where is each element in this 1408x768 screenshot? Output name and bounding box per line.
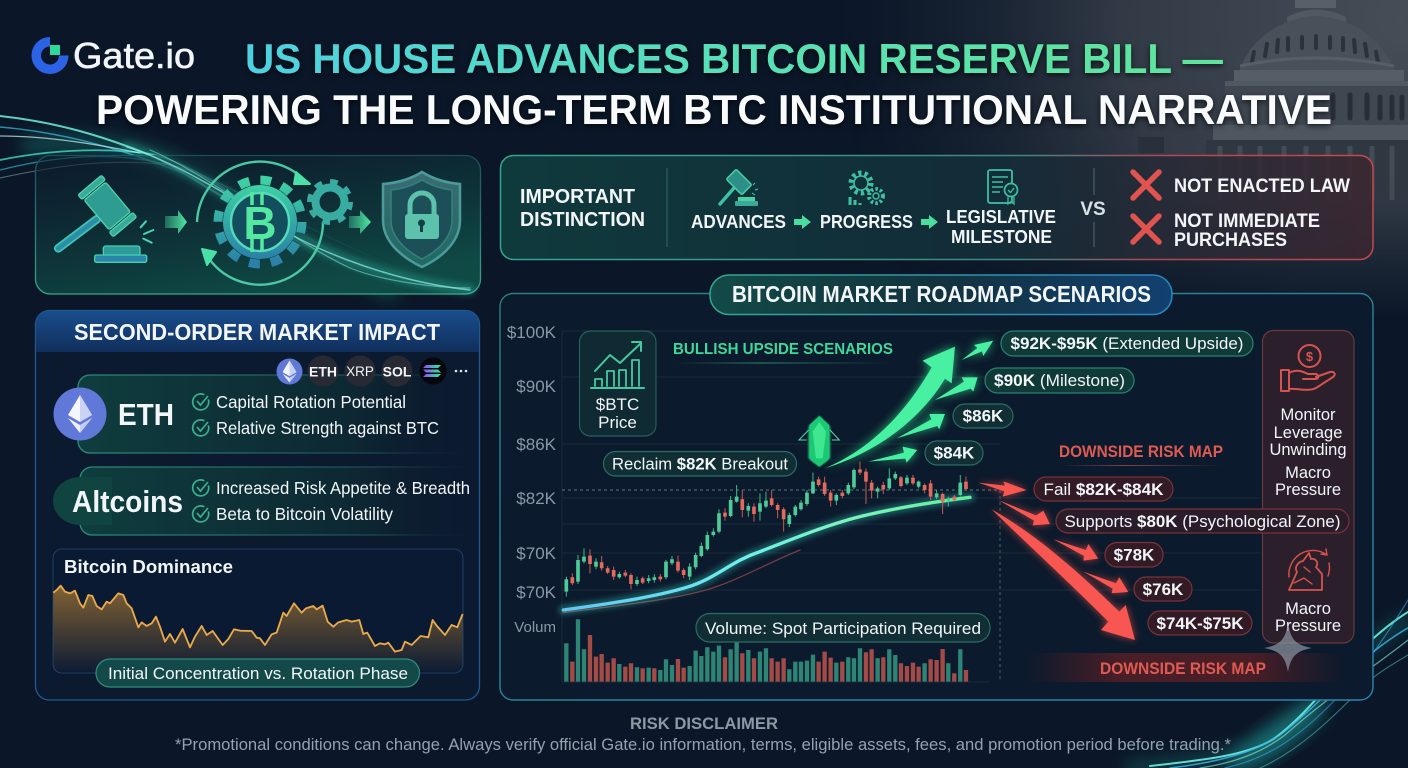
arrow bbox=[349, 210, 371, 234]
pill: $90K milestone: $90K (Milestone) bbox=[994, 371, 1125, 390]
icon: green breakout crystal bbox=[799, 416, 839, 467]
pill: $74K-$75K: $74K-$75K bbox=[1156, 614, 1244, 633]
VS divider bbox=[1080, 168, 1106, 247]
text: risk disclaimer heading: RISK DISCLAIMER bbox=[630, 715, 778, 733]
arrow bbox=[165, 210, 187, 234]
pill: volume note: Volume: Spot Participation Required bbox=[705, 619, 981, 638]
panel: risk monitor bbox=[1262, 330, 1354, 643]
chart: Bitcoin dominance bbox=[53, 549, 463, 687]
moving averages bbox=[563, 497, 970, 613]
text: monitor leverage: Pressure bbox=[1275, 481, 1341, 499]
text: monitor leverage bbox=[1269, 406, 1347, 499]
pill: $84K bbox=[925, 441, 983, 465]
illustration: US Capitol dome bbox=[1138, 0, 1408, 200]
axis labels: $86K bbox=[516, 435, 557, 454]
VS divider: VS bbox=[1080, 199, 1106, 220]
icon: gavel bbox=[58, 175, 153, 262]
band: downside risk map bbox=[1025, 653, 1345, 682]
pill: $76K: $76K bbox=[1143, 580, 1184, 599]
text: not immediate purchases bbox=[1174, 211, 1320, 251]
row: Altcoins bbox=[53, 467, 475, 535]
chart: Bitcoin dominance: Bitcoin Dominance bbox=[64, 557, 233, 577]
heading: important distinction bbox=[520, 186, 645, 231]
pill: $92K-$95K extended upside: $92K-$95K (Extended Upside) bbox=[1010, 334, 1244, 353]
axis labels bbox=[507, 323, 557, 636]
text: monitor leverage: Leverage bbox=[1274, 424, 1342, 442]
icon card: $BTC price: Price bbox=[598, 413, 637, 432]
pill: reclaim breakout: Reclaim $82K Breakout bbox=[612, 456, 788, 474]
row: Altcoins: Increased Risk Appetite & Breadth bbox=[216, 478, 470, 498]
pill: $76K bbox=[1134, 577, 1192, 601]
title bbox=[96, 35, 1332, 133]
title: US HOUSE ADVANCES BITCOIN RESERVE BILL — bbox=[245, 35, 1223, 82]
flow labels bbox=[691, 206, 1056, 247]
pill: $84K: $84K bbox=[934, 444, 975, 462]
axis labels: $70K bbox=[516, 583, 557, 602]
candles bbox=[566, 462, 966, 597]
pill: volume note bbox=[696, 614, 990, 642]
row: ETH: Capital Rotation Potential bbox=[216, 392, 406, 412]
volume bars bbox=[566, 619, 966, 682]
flow labels: LEGISLATIVE bbox=[946, 206, 1056, 227]
icon: red cross bbox=[1133, 172, 1159, 198]
text: not immediate purchases: PURCHASES bbox=[1174, 230, 1287, 251]
icon: bitcoin gear with cycle arrows bbox=[197, 162, 350, 285]
pill: fail $82K-$84K: Fail $82K-$84K bbox=[1044, 480, 1164, 499]
icon: hand holding coin: $ bbox=[1306, 349, 1314, 364]
icon: small gear bbox=[310, 182, 350, 222]
text: monitor leverage: Unwinding bbox=[1269, 441, 1347, 459]
pill: rotation caption bbox=[96, 659, 420, 687]
icon: macro bull pressure bbox=[1289, 549, 1329, 590]
text: not enacted law: NOT ENACTED LAW bbox=[1174, 176, 1350, 197]
text: macro pressure bbox=[1275, 600, 1341, 635]
pill: $86K bbox=[953, 404, 1013, 428]
pill: $78K: $78K bbox=[1114, 546, 1155, 564]
token chips: SOL bbox=[383, 364, 412, 380]
heading: bullish upside scenarios: BULLISH UPSIDE SCENARIOS bbox=[673, 341, 893, 358]
icon: gears progress bbox=[850, 173, 883, 205]
icon: gavel small bbox=[720, 169, 758, 206]
pill: $86K: $86K bbox=[963, 406, 1004, 426]
token chips: ETH bbox=[309, 364, 337, 380]
pill: supports $80K: Supports $80K (Psychological Zone) bbox=[1064, 512, 1340, 531]
flow labels: PROGRESS bbox=[820, 211, 913, 232]
panel: legislation process illustration bbox=[36, 147, 480, 294]
text: risk disclaimer body: *Promotional conditions can change. Always verify official Gate.io information, terms, eligible assets, fees, and promotion period before trading.* bbox=[175, 736, 1232, 754]
icon card: $BTC price: $BTC bbox=[596, 395, 639, 414]
row: ETH: ETH bbox=[118, 397, 174, 432]
heading bar: SECOND-ORDER MARKET IMPACT bbox=[74, 319, 440, 345]
pill: $78K bbox=[1105, 542, 1163, 567]
panel: second-order market impact bbox=[36, 310, 480, 700]
icon: shield with lock bbox=[383, 172, 460, 267]
icon: red cross bbox=[1133, 216, 1159, 242]
pill: $74K-$75K bbox=[1148, 611, 1252, 635]
icon: Ethereum bbox=[54, 388, 106, 440]
arrows: bullish scenarios bbox=[825, 341, 993, 468]
icon: bitcoin gear with cycle arrows: B bbox=[243, 197, 277, 249]
axis labels: $90K bbox=[516, 377, 557, 396]
pill: $90K milestone bbox=[985, 368, 1134, 393]
icon: hand holding coin bbox=[1281, 345, 1335, 391]
title: POWERING THE LONG-TERM BTC INSTITUTIONAL NARRATIVE bbox=[96, 86, 1332, 133]
axis labels: $100K bbox=[507, 323, 557, 342]
heading bar bbox=[36, 311, 479, 352]
text: macro pressure: Pressure bbox=[1275, 617, 1341, 635]
text: monitor leverage: Macro bbox=[1285, 464, 1331, 482]
axis labels: $70K bbox=[516, 544, 557, 563]
row: ETH bbox=[54, 375, 470, 453]
panel: important distinction bbox=[500, 156, 1373, 260]
logo: Gate.io: Gate.io bbox=[73, 35, 195, 76]
axis labels: $82K bbox=[516, 489, 557, 508]
row: Altcoins: Altcoins bbox=[72, 484, 183, 519]
pill: rotation caption: Initial Concentration vs. Rotation Phase bbox=[108, 664, 408, 683]
decorative wisp across panel bbox=[127, 147, 470, 290]
decorative sparkle bbox=[1264, 624, 1312, 672]
band: downside risk map: DOWNSIDE RISK MAP bbox=[1100, 660, 1266, 678]
chart: candlesticks, moving averages and volume bbox=[563, 341, 993, 682]
decorative wisp: top left bbox=[0, 116, 470, 292]
heading: important distinction: IMPORTANT bbox=[520, 186, 635, 208]
text: not immediate purchases: NOT IMMEDIATE bbox=[1174, 211, 1320, 232]
heading: downside risk map: DOWNSIDE RISK MAP bbox=[1059, 443, 1223, 461]
icon: document with seal bbox=[988, 170, 1018, 204]
pill: reclaim breakout bbox=[604, 452, 796, 476]
heading pill: BITCOIN MARKET ROADMAP SCENARIOS bbox=[732, 281, 1151, 307]
row: Altcoins: Beta to Bitcoin Volatility bbox=[216, 504, 393, 524]
panel: bitcoin market roadmap bbox=[500, 275, 1373, 700]
token chips: XRP bbox=[346, 364, 374, 379]
text: monitor leverage: Monitor bbox=[1280, 406, 1336, 424]
heading pill bbox=[710, 275, 1172, 314]
flow labels: MILESTONE bbox=[951, 226, 1052, 247]
icon card: $BTC price bbox=[580, 331, 656, 436]
flow labels: ADVANCES bbox=[691, 211, 786, 232]
decorative wisp: bottom right bbox=[1130, 600, 1408, 768]
pill: fail $82K-$84K bbox=[1034, 477, 1173, 501]
text: macro pressure: Macro bbox=[1285, 600, 1331, 618]
heading: important distinction: DISTINCTION bbox=[520, 209, 645, 231]
arrows: downside scenarios bbox=[978, 481, 1135, 640]
row: ETH: Relative Strength against BTC bbox=[216, 418, 439, 438]
token chips bbox=[276, 356, 467, 386]
axis labels: Volum bbox=[514, 619, 556, 636]
